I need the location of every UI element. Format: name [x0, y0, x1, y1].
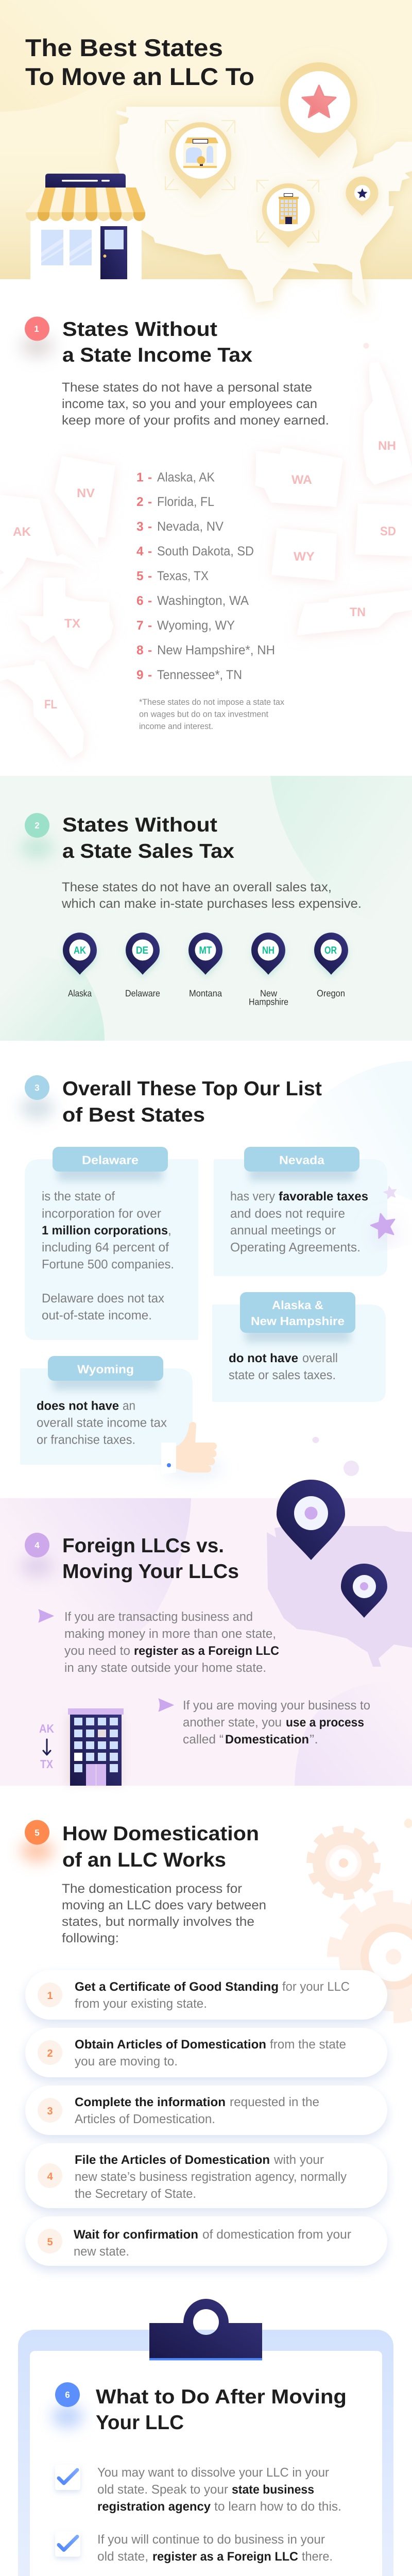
card: Nevada: Operating Agreements.	[230, 1241, 360, 1255]
card: Nevada	[214, 1147, 387, 1276]
card: Delaware: Delaware does not tax	[42, 1292, 164, 1306]
pin: Alaska: Alaska	[68, 988, 92, 998]
pin: Montana	[188, 933, 222, 998]
card: Wyoming: overall state income tax	[37, 1416, 167, 1430]
step 3: 3	[47, 2106, 53, 2117]
heading: Your LLC	[96, 2412, 184, 2434]
icon: large map pin	[277, 1480, 345, 1560]
numbered state list: -	[148, 594, 152, 608]
icon: clipboard clip	[149, 2299, 262, 2361]
footnote: on wages but do on tax investment	[139, 710, 268, 719]
heading: What to Do After Moving	[96, 2386, 347, 2408]
numbered state list: 6	[136, 594, 144, 608]
footnote: income and interest.	[139, 722, 213, 731]
numbered state list: 7	[136, 619, 144, 633]
step 5: new state.	[74, 2245, 129, 2259]
text: domestication: called “	[183, 1733, 224, 1747]
number badge 2: 2	[35, 821, 40, 831]
pin: Oregon: OR	[324, 945, 337, 956]
card: Wyoming: an	[123, 1399, 135, 1413]
numbered state list: -	[148, 495, 152, 509]
numbered state list: -	[148, 619, 152, 633]
AK to TX indicator: TX	[40, 1757, 54, 1771]
heading: a State Sales Tax	[62, 840, 234, 862]
heading: Moving Your LLCs	[62, 1561, 239, 1583]
AK to TX indicator	[39, 1722, 54, 1771]
numbered state list: 5	[136, 569, 144, 583]
text: foreign LLC: making money in more than one state,	[64, 1627, 276, 1641]
icon: purple stars	[369, 1185, 398, 1239]
pin: Alaska	[63, 933, 97, 998]
decorative state: Florida: FL	[44, 698, 57, 711]
pin: Montana: Montana	[189, 988, 222, 998]
intro text: The domestication process for	[62, 1882, 242, 1896]
arrow bullet 1	[39, 1609, 54, 1622]
card: Delaware: is the state of	[42, 1190, 115, 1204]
card: Nevada: Nevada	[279, 1153, 324, 1166]
numbered state list: -	[148, 545, 152, 558]
decorative state: Wyoming: WY	[294, 550, 315, 564]
number badge 3: 3	[35, 1083, 40, 1093]
intro text: following:	[62, 1931, 119, 1945]
step 5: 5	[47, 2236, 53, 2248]
text: domestication: ”.	[310, 1733, 318, 1747]
step 2: 2	[47, 2048, 53, 2059]
decorative state: Nevada: NV	[77, 486, 95, 500]
text: foreign LLC: in any state outside your home state.	[64, 1661, 266, 1675]
title: To Move an LLC To	[25, 63, 254, 91]
heading: Foreign LLCs vs.	[62, 1535, 224, 1557]
number badge 1: 1	[34, 324, 39, 334]
step 1	[25, 1970, 387, 2020]
checklist item 1: state business	[232, 2483, 314, 2497]
checklist item 2	[55, 2532, 333, 2564]
step 1: 1	[47, 1990, 53, 2002]
decorative state: Texas	[16, 578, 113, 669]
pin: Delaware: Delaware	[125, 988, 160, 998]
arrow bullet 2	[159, 1699, 174, 1711]
intro text: These states do not have a personal state	[62, 380, 312, 395]
decorative state: Washington: WA	[291, 473, 312, 487]
card: Delaware: incorporation for over	[42, 1207, 161, 1221]
number badge 6	[52, 2382, 83, 2428]
step 2: Obtain Articles of Domestication	[75, 2038, 266, 2052]
checklist item 1	[55, 2465, 341, 2514]
card: Delaware	[25, 1147, 198, 1340]
intro text: keep more of your profits and money earned.	[62, 413, 329, 428]
numbered state list: 9	[136, 668, 144, 682]
icon: map pin with office building	[257, 180, 319, 248]
decorative state: Alaska	[0, 495, 90, 590]
step 4: with your	[273, 2153, 324, 2167]
numbered state list: 2	[136, 495, 144, 509]
number badge 3	[21, 1075, 54, 1119]
numbered state list: 1	[136, 471, 144, 484]
card: Alaska and New Hampshire: Alaska &	[272, 1298, 323, 1312]
pin: Delaware	[125, 933, 160, 998]
map of the United States	[267, 1526, 412, 1667]
card: Delaware: Delaware	[82, 1153, 139, 1166]
text: domestication: If you are moving your business to	[183, 1699, 370, 1713]
pin: Montana: MT	[199, 945, 212, 956]
number badge 4	[21, 1533, 54, 1578]
step 4: the Secretary of State.	[75, 2187, 196, 2201]
pin: Alaska: AK	[74, 945, 86, 956]
number badge 6: 6	[65, 2390, 70, 2400]
panel: hero	[0, 0, 412, 307]
text: domestication: use a process	[286, 1716, 364, 1730]
intro text: These states do not have an overall sales tax,	[62, 880, 332, 894]
pin: New Hampshire: New	[260, 988, 278, 998]
step 3: requested in the	[230, 2095, 319, 2109]
step 1: for your LLC	[282, 1980, 350, 1994]
card: Alaska and New Hampshire: overall	[302, 1351, 338, 1365]
checklist item 2: there.	[302, 2550, 333, 2564]
intro text	[62, 380, 329, 428]
numbered state list: -	[148, 471, 152, 484]
heading: a State Income Tax	[62, 344, 252, 366]
heading	[62, 1535, 239, 1583]
icon: building	[66, 1708, 124, 1786]
intro text: states, but normally involves the	[62, 1914, 254, 1929]
pin: Delaware: DE	[136, 945, 148, 956]
icon: small map pin	[341, 1564, 387, 1618]
decorative state: Tennessee: TN	[350, 605, 366, 619]
numbered state list: New Hampshire*, NH	[157, 643, 275, 657]
step 4: new state’s business registration agency, normally	[75, 2170, 347, 2184]
decorative state: Texas: TX	[64, 617, 80, 631]
step 4	[25, 2143, 387, 2208]
numbered state list: -	[148, 569, 152, 583]
step 4: File the Articles of Domestication	[75, 2153, 270, 2167]
step 4: 4	[47, 2171, 53, 2182]
numbered state list: Nevada, NV	[157, 519, 224, 534]
card: Nevada: favorable taxes	[279, 1190, 368, 1204]
numbered state list: 8	[136, 643, 144, 657]
checklist item 2: If you will continue to do business in your	[97, 2533, 325, 2547]
decorative state: New Hampshire: NH	[378, 439, 396, 453]
icon: large gear	[333, 1896, 412, 2017]
checklist item 1: old state. Speak to your	[97, 2483, 228, 2497]
numbered state list: Wyoming, WY	[157, 618, 235, 633]
numbered state list: -	[148, 520, 152, 534]
text: foreign LLC: register as a Foreign LLC	[134, 1644, 279, 1658]
numbered state list: 3	[136, 520, 144, 534]
intro text	[61, 880, 362, 911]
card: Wyoming	[20, 1356, 193, 1465]
card: Delaware: 1 million corporations	[42, 1224, 168, 1238]
card: Wyoming: does not have	[37, 1399, 119, 1413]
icon: storefront	[26, 174, 145, 279]
numbered state list: Texas, TX	[157, 569, 209, 583]
card: Nevada: annual meetings or	[230, 1224, 336, 1238]
step 5	[25, 2216, 387, 2266]
step 5: of domestication from your	[202, 2228, 351, 2242]
heading	[96, 2386, 347, 2434]
checklist item 1: registration agency	[97, 2500, 211, 2514]
step 2	[25, 2028, 387, 2077]
card: Alaska and New Hampshire: do not have	[229, 1351, 298, 1365]
text: foreign LLC: If you are transacting business and	[64, 1610, 253, 1624]
intro text: moving an LLC does vary between	[62, 1898, 266, 1912]
AK to TX indicator: AK	[39, 1722, 54, 1735]
heading: How Domestication	[62, 1823, 259, 1845]
number badge 2	[21, 813, 54, 859]
decorative state: Wyoming	[271, 528, 337, 581]
checklist item 1: You may want to dissolve your LLC in your	[97, 2466, 329, 2480]
step 1: Get a Certificate of Good Standing	[75, 1980, 279, 1994]
numbered state list: South Dakota, SD	[157, 544, 254, 558]
footnote: *These states do not impose a state tax	[139, 698, 285, 707]
number badge 5	[21, 1820, 54, 1862]
card: Wyoming: Wyoming	[77, 1362, 134, 1376]
card: Delaware: including 64 percent of	[42, 1241, 169, 1255]
pin: Oregon: Oregon	[317, 988, 345, 998]
checklist item 2: old state,	[97, 2550, 148, 2564]
panel: best states	[20, 1061, 412, 1480]
numbered state list: -	[148, 668, 152, 682]
decorative state: Alaska: AK	[13, 525, 31, 539]
map of the United States	[115, 107, 412, 307]
decorative state: Washington	[255, 447, 343, 507]
icon: big map pin with star	[280, 62, 357, 158]
step 3	[25, 2086, 387, 2135]
heading	[62, 814, 234, 862]
icon: small map pin with navy star	[346, 177, 378, 216]
card: Nevada: and does not require	[230, 1207, 345, 1221]
numbered state list: -	[148, 643, 152, 657]
heading: of an LLC Works	[62, 1849, 226, 1871]
heading: Overall These Top Our List	[62, 1078, 322, 1100]
checklist item 1: to learn how to do this.	[214, 2500, 341, 2514]
heading	[62, 1823, 259, 1871]
decorative state: Florida	[0, 660, 84, 758]
card: Alaska and New Hampshire	[212, 1292, 386, 1402]
step 2: you are moving to.	[75, 2055, 178, 2069]
step 5: Wait for confirmation	[74, 2228, 198, 2242]
panel: how domestication works	[21, 1819, 412, 2266]
panel: clipboard checklist	[18, 2299, 393, 2576]
intro text: which can make in-state purchases less expensive.	[61, 896, 362, 911]
card: Alaska and New Hampshire: New Hampshire	[251, 1314, 345, 1328]
heading: States Without	[62, 318, 217, 341]
number badge 4: 4	[35, 1540, 40, 1550]
numbered state list	[136, 470, 275, 682]
footnote	[139, 698, 285, 731]
card: Wyoming: or franchise taxes.	[37, 1433, 135, 1447]
checklist item 2: register as a Foreign LLC	[152, 2550, 298, 2564]
panel: foreign LLCs vs moving	[0, 1480, 412, 1786]
text: foreign LLC	[64, 1610, 279, 1675]
text: foreign LLC: you need to	[64, 1644, 130, 1658]
decorative state: New Hampshire	[363, 362, 412, 485]
card: Nevada: has very	[230, 1190, 276, 1204]
card: Alaska and New Hampshire: state or sales taxes.	[229, 1368, 336, 1382]
decorative state: Tennessee	[297, 590, 412, 635]
step 2: from the state	[270, 2038, 346, 2052]
step 3: Articles of Domestication.	[75, 2112, 215, 2126]
numbered state list: Florida, FL	[157, 495, 214, 509]
heading	[62, 318, 252, 366]
decorative state: South Dakota	[355, 503, 412, 556]
title: The Best States	[25, 35, 223, 62]
text: domestication: another state, you	[183, 1716, 282, 1730]
icon: map pin with shop	[165, 121, 235, 199]
step 3: Complete the information	[75, 2095, 226, 2109]
title	[25, 35, 254, 91]
step 1: from your existing state.	[75, 1997, 207, 2011]
pin: New Hampshire	[249, 933, 288, 1007]
intro text	[62, 1882, 266, 1945]
heading: States Without	[62, 814, 217, 836]
pin: New Hampshire: Hampshire	[249, 996, 288, 1007]
heading	[62, 1078, 322, 1126]
decorative state: Nevada	[55, 456, 115, 549]
decorative state: South Dakota: SD	[380, 524, 396, 538]
pin: New Hampshire: NH	[262, 945, 274, 956]
text: domestication	[183, 1699, 370, 1747]
icon: thumbs up	[161, 1422, 224, 1480]
intro text: income tax, so you and your employees can	[62, 397, 317, 411]
text: domestication: Domestication	[225, 1733, 309, 1747]
panel: states without income tax	[0, 316, 412, 758]
card: Delaware: out-of-state income.	[42, 1309, 152, 1323]
number badge 1	[21, 316, 54, 358]
card: Delaware: Fortune 500 companies.	[42, 1258, 174, 1272]
card: Delaware: ,	[168, 1224, 171, 1238]
number badge 5: 5	[35, 1828, 40, 1838]
pin: Oregon	[314, 933, 348, 998]
numbered state list: Tennessee*, TN	[157, 668, 242, 682]
panel: states without sales tax	[0, 776, 412, 1041]
icon: small gear	[310, 1829, 377, 1896]
numbered state list: Washington, WA	[157, 594, 249, 608]
numbered state list: 4	[136, 545, 144, 558]
numbered state list: Alaska, AK	[157, 470, 215, 484]
heading: of Best States	[62, 1104, 205, 1126]
